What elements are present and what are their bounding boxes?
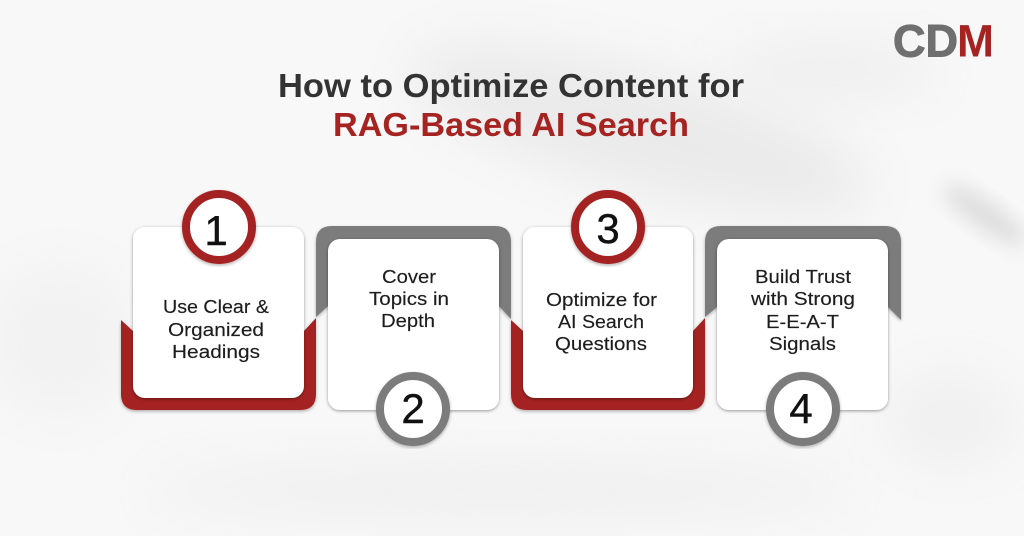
step 2 label	[369, 266, 449, 331]
title: How to Optimize Content for	[278, 67, 744, 104]
step 4 number badge	[770, 376, 836, 442]
step 4 label: E-E-A-T	[766, 311, 839, 332]
step 1 number badge	[186, 194, 252, 260]
step 3: red frame, card and badge	[511, 194, 705, 410]
step 2 number badge	[380, 376, 446, 442]
logo: CDM: M	[957, 16, 994, 66]
step 1 label	[163, 296, 270, 362]
step 2 label: Cover	[382, 266, 436, 287]
logo: CDM: CD	[893, 16, 958, 66]
step 2 label: Depth	[381, 310, 435, 331]
step 4 label: with Strong	[750, 288, 855, 309]
step 3 label	[546, 289, 657, 354]
logo: CDM	[893, 16, 994, 66]
step 3 label: Optimize for	[546, 289, 657, 310]
step 3 number badge: 3	[596, 205, 620, 252]
step 2 number badge: 2	[401, 385, 425, 432]
step 2: grey frame, card and badge	[316, 226, 511, 442]
step 2 label: Topics in	[369, 288, 449, 309]
step 4 label: Signals	[769, 333, 836, 354]
step 1 label: Organized	[168, 319, 264, 340]
step 3 label: Questions	[555, 333, 647, 354]
title: RAG-Based AI Search	[333, 106, 689, 143]
step 4 label	[750, 266, 855, 354]
step 4: grey frame, card and badge	[705, 226, 901, 442]
step 1 label: Use Clear &	[163, 296, 270, 317]
step 3 number badge	[575, 194, 641, 260]
step 3 label: AI Search	[558, 311, 644, 332]
step 1 label: Headings	[172, 341, 260, 362]
step 1: red frame, card and badge	[121, 194, 316, 410]
title	[278, 67, 744, 143]
step 4 number badge: 4	[789, 385, 813, 432]
step 4 label: Build Trust	[755, 266, 851, 287]
step 1 number badge: 1	[204, 207, 228, 254]
